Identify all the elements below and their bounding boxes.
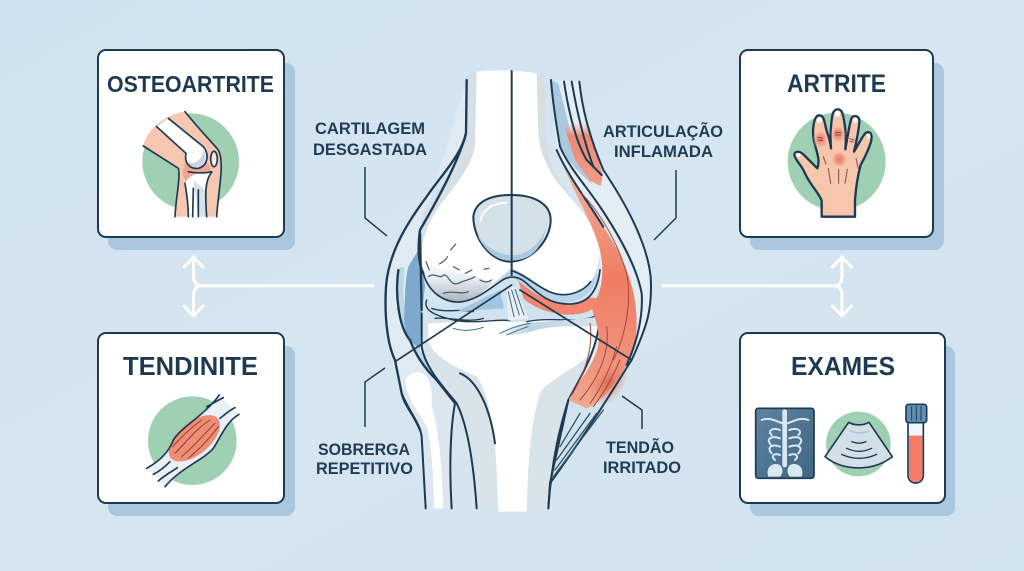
dark inflammation blot [580, 353, 636, 413]
patella body [473, 195, 551, 262]
inflamed meniscus [517, 277, 597, 315]
outer left contour lines [386, 80, 467, 430]
fibula [402, 370, 455, 508]
left joint fluid [404, 250, 425, 348]
icon: knee [142, 112, 239, 217]
label: tendão irritado: IRRITADO [603, 458, 681, 477]
card body [98, 333, 284, 503]
patella crescent [477, 228, 546, 261]
fibula outline [402, 378, 455, 508]
leader line: articulação [654, 170, 676, 240]
femur outline [419, 133, 466, 273]
streak fibres [500, 323, 530, 335]
panel: artrite [740, 50, 944, 250]
left cartilage blue [457, 290, 504, 312]
arrow: left connector [184, 257, 373, 316]
label: articulação inflamada: ARTICULAÇÃO [603, 121, 723, 141]
label: cartilagem desgastada: CARTILAGEM [315, 119, 425, 138]
right cartilage band [500, 268, 598, 303]
label: sobrerga repetitivo [316, 440, 413, 478]
lower tendon fill [550, 380, 613, 483]
panel: tendinite [98, 333, 295, 516]
card body [740, 333, 945, 503]
label: cartilagem desgastada: DESGASTADA [313, 140, 427, 159]
heading: EXAMES [791, 351, 895, 381]
heading: ARTRITE [787, 70, 886, 98]
femur [418, 70, 602, 302]
label: cartilagem desgastada [313, 119, 427, 159]
panel: osteoartrite [98, 50, 295, 250]
leader line: cartilagem [365, 167, 387, 236]
muscle fibres [572, 193, 629, 407]
leader line: tendão [622, 396, 642, 429]
card shadow [108, 346, 295, 516]
left soft tissue envelope [386, 80, 467, 393]
icon: x-ray [756, 408, 814, 478]
light streak below plateau [493, 317, 600, 336]
fibula highlight [405, 372, 443, 508]
tibia [422, 310, 600, 512]
icon: hand [788, 109, 886, 217]
joint contour lines [423, 270, 600, 304]
leader line: sobrecarga [365, 368, 385, 427]
plateau band [425, 277, 598, 322]
cartilage cracks [426, 244, 492, 293]
fibula body [402, 370, 455, 508]
tibial plateau meniscus [425, 277, 600, 336]
label: articulação inflamada [603, 121, 723, 161]
left crossing line [395, 285, 512, 362]
femur shading [418, 73, 602, 290]
card body [740, 50, 933, 237]
central ligament [507, 287, 528, 321]
card shadow [750, 63, 944, 250]
outer right contour lines [548, 80, 651, 508]
icon: ultrasound [825, 412, 892, 476]
card shadow [750, 346, 955, 516]
tibia bone [428, 317, 600, 512]
panel: exames [740, 333, 955, 516]
knee anatomy illustration [386, 70, 651, 512]
tibia outline [422, 310, 600, 508]
worn cartilage area [423, 262, 493, 302]
central vertical line [509, 71, 515, 275]
patella [473, 195, 551, 262]
label: sobrerga repetitivo: REPETITIVO [316, 459, 413, 478]
icon: blood tube [906, 404, 927, 483]
plateau fibres [453, 289, 524, 330]
femur bone [421, 70, 600, 301]
card body [98, 50, 284, 237]
left blue strip [400, 270, 435, 377]
label: tendão irritado: TENDÃO [606, 437, 674, 457]
heading: OSTEOARTRITE [107, 71, 274, 97]
heading: TENDINITE [123, 351, 258, 381]
icon: tendon [147, 395, 239, 487]
tendon fibres [553, 410, 603, 477]
inflamed muscle [557, 150, 637, 408]
label: articulação inflamada: INFLAMADA [614, 142, 713, 161]
arrow: right connector [663, 257, 852, 316]
right upper inflamed band [563, 123, 603, 186]
label: tendão irritado [603, 437, 681, 477]
tibia shading [422, 310, 600, 508]
right tendon sheath [550, 80, 651, 483]
joint swellings [813, 129, 829, 149]
card shadow [108, 63, 295, 250]
right blue strip [551, 80, 593, 185]
label: sobrerga repetitivo: SOBRERGA [318, 440, 410, 459]
patella highlight [481, 203, 507, 221]
plateau outline [426, 298, 598, 322]
right crossing line [520, 290, 632, 360]
nails [817, 117, 822, 123]
